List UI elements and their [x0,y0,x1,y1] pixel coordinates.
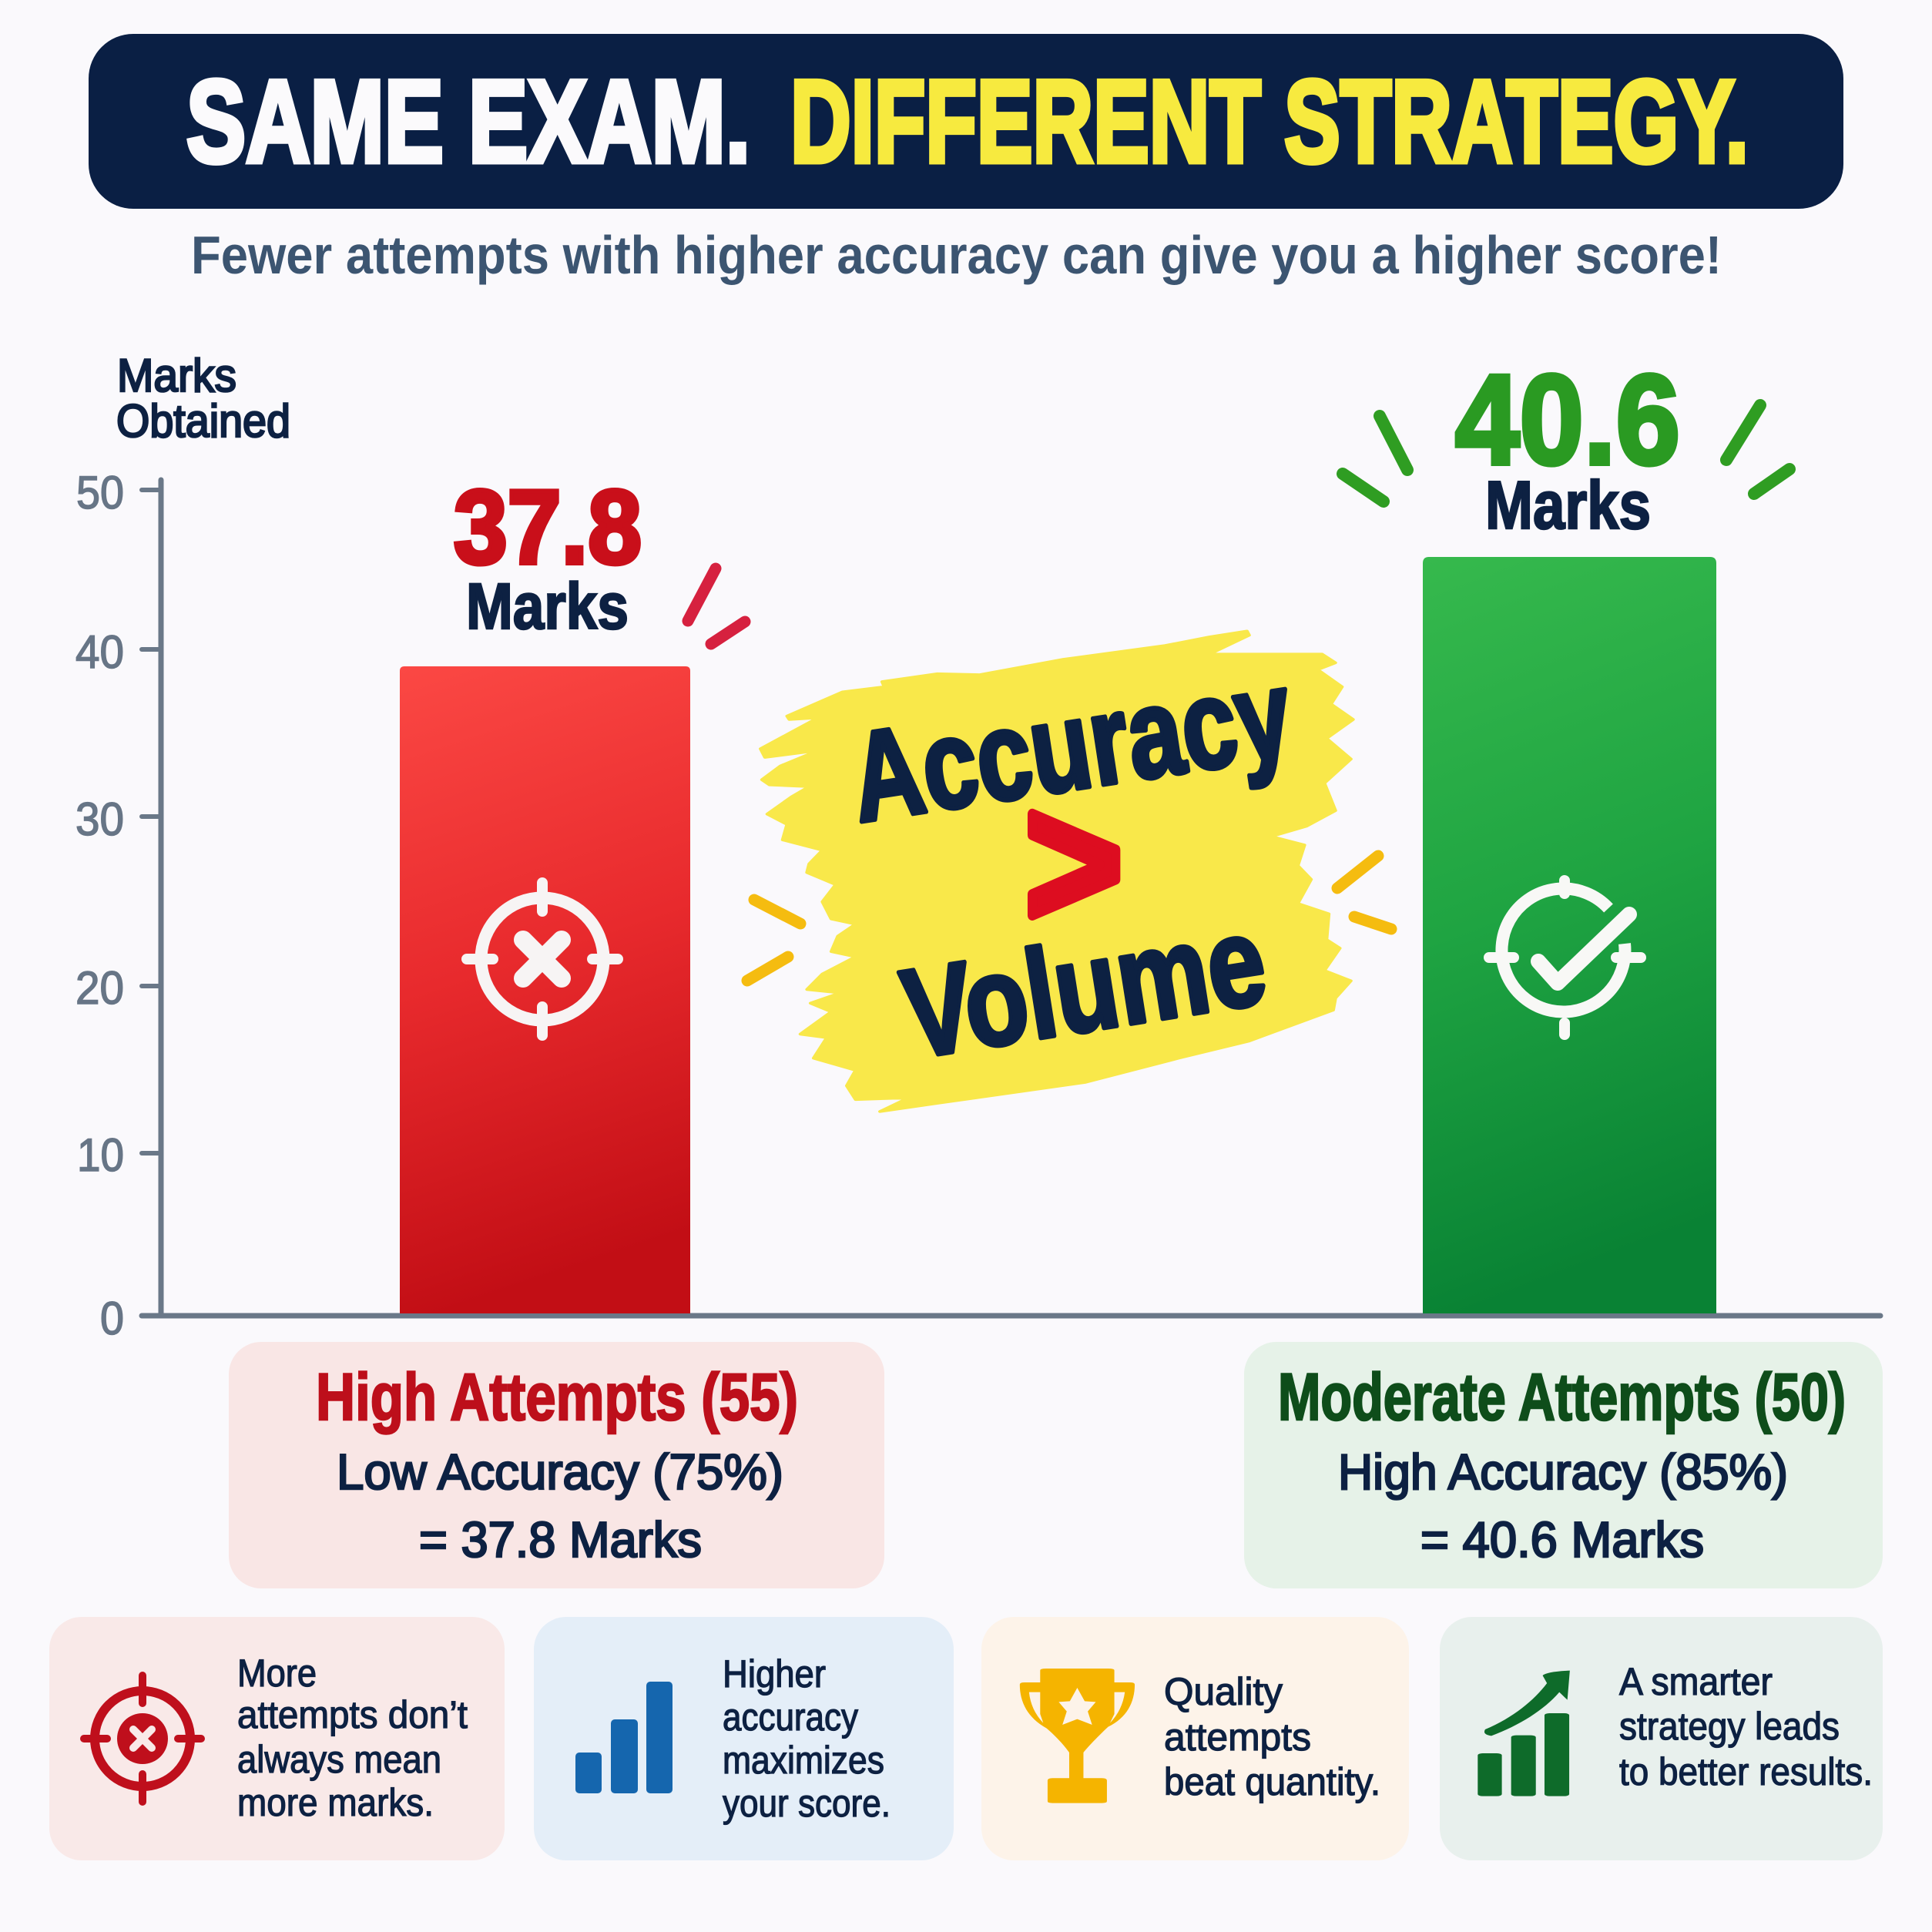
card text: Higher [723,1652,826,1696]
detail: marks: = 40.6 Marks [1420,1511,1704,1568]
icon: trophy [1020,1669,1135,1803]
subtitle: Fewer attempts with higher accuracy can give you a higher score! [191,225,1722,285]
value: 40.6 marks: Marks [1485,467,1651,543]
burst marks: yellow [747,856,1391,981]
bar chart axes [75,467,1880,1344]
card text: More [237,1652,317,1695]
icon: target with check [1489,880,1641,1035]
title: same exam: SAME EXAM. [186,56,750,187]
value: 37.8 marks: Marks [466,570,629,642]
card text: more marks. [237,1781,434,1824]
card text: always mean [237,1738,441,1781]
word: accuracy: Accuracy [842,642,1300,849]
card text: Quality [1164,1670,1283,1713]
word: volume: Volume [894,889,1275,1085]
yellow brush stroke [760,631,1353,1112]
card text [237,1652,468,1824]
card text: attempts [1164,1716,1311,1759]
card text: your score. [723,1782,891,1825]
card text: to better results. [1619,1750,1873,1793]
y axis title: Marks [117,350,236,401]
greater-than sign: > [1025,757,1122,967]
axis tick labels: 0 [100,1293,124,1344]
icon: target with cross [467,883,618,1035]
panel: higher accuracy [534,1617,954,1860]
detail: marks: = 37.8 Marks [419,1511,702,1568]
callout: accuracy beats volume [760,631,1353,1112]
panel: moderate attempts [1244,1342,1883,1588]
detail: accuracy: Low Accuracy (75%) [337,1444,783,1500]
detail: accuracy: High Accuracy (85%) [1338,1444,1788,1500]
card text: attempts don’t [237,1693,468,1736]
burst marks: red [688,569,745,644]
axis tick labels: 20 [75,962,124,1014]
icon: growth chart [1478,1671,1570,1796]
bar: high attempts [400,666,690,1313]
axis tick labels: 50 [76,467,124,518]
y axis title: Obtained [116,395,290,447]
bar: moderate attempts [1423,557,1716,1313]
axis tick labels: 10 [77,1129,124,1181]
title banner [89,34,1843,209]
card text: beat quantity. [1164,1760,1380,1803]
card text: maximizes [723,1739,884,1782]
panel: more attempts [49,1617,505,1860]
card text [723,1652,891,1825]
axis tick labels [75,467,124,1344]
panel: smarter strategy [1440,1617,1883,1860]
value: 37.8 marks: 37.8 [454,468,642,585]
card text [1164,1670,1380,1803]
panel: quality attempts [981,1617,1409,1860]
heading: high attempts: High Attempts (55) [316,1360,798,1434]
axis tick labels: 30 [75,793,124,845]
card text [1619,1660,1873,1793]
card text: accuracy [723,1696,858,1739]
panel: high attempts [229,1342,884,1588]
value: 40.6 marks: 40.6 [1455,349,1680,491]
value: 37.8 marks [454,468,642,642]
value: 40.6 marks [1455,349,1680,543]
y axis title [116,350,290,447]
icon: blue bars [575,1682,673,1793]
icon: red target [84,1675,201,1802]
card text: A smarter [1619,1660,1773,1703]
card text: strategy leads [1619,1705,1840,1748]
axis tick labels: 40 [75,626,124,678]
burst marks: green [1343,405,1789,501]
